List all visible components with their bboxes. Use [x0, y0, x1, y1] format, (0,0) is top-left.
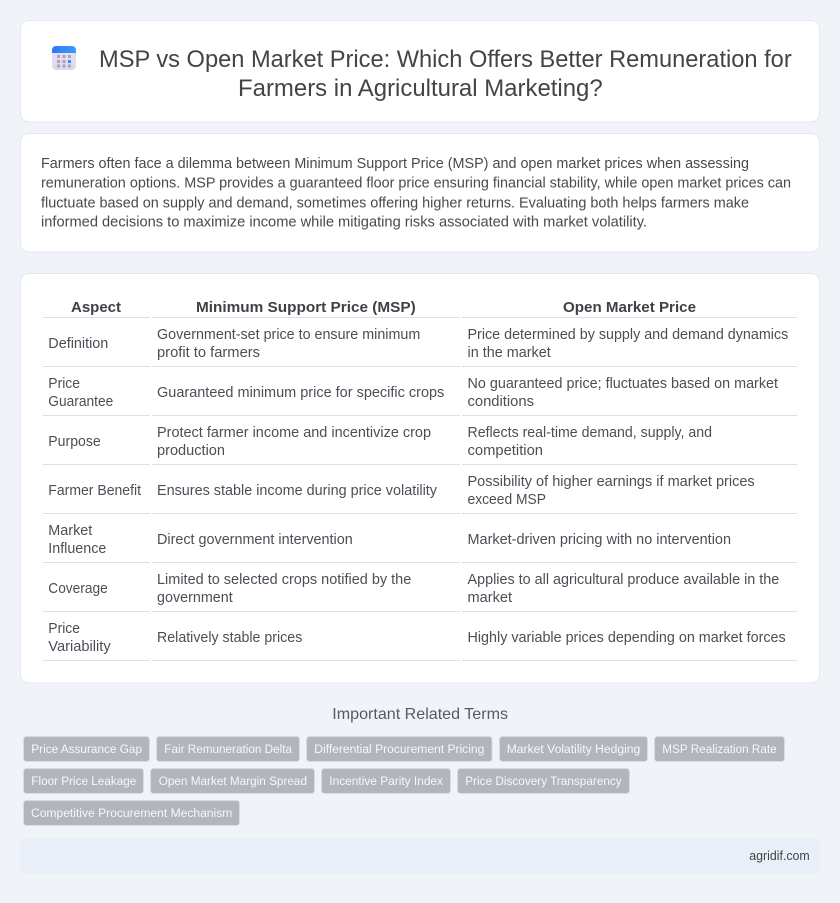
icon: calendar — [52, 46, 76, 70]
tag — [458, 768, 630, 794]
row: coverage: Applies to all agricultural produce available in the — [468, 572, 779, 588]
row: price guarantee: No guaranteed price; fluctuates based on market — [468, 376, 778, 392]
tag: Market Volatility Hedging — [507, 742, 640, 756]
tag: Incentive Parity Index — [329, 774, 443, 788]
panel: introduction — [20, 134, 820, 252]
tag — [24, 736, 150, 762]
title: MSP vs Open Market Price: Which Offers Better Remuneration for — [99, 46, 792, 73]
row: farmer benefit: Ensures stable income during price volatility — [157, 483, 438, 499]
row: price variability: Price — [48, 621, 80, 637]
row: coverage — [48, 572, 779, 606]
tag: Differential Procurement Pricing — [314, 742, 484, 756]
tag — [654, 736, 784, 762]
table header: Aspect — [71, 300, 121, 316]
row: price variability — [48, 621, 786, 655]
row: price variability: Highly variable prices depending on market forces — [468, 630, 786, 646]
title: Farmers in Agricultural Marketing? — [238, 75, 603, 102]
row: definition: in the market — [468, 345, 551, 361]
row: purpose: production — [157, 443, 225, 459]
tag — [24, 800, 240, 826]
row: market influence: Direct government intervention — [157, 532, 353, 548]
tag — [322, 768, 450, 794]
row: market influence — [48, 523, 731, 557]
row: purpose: competition — [468, 443, 543, 459]
row: definition: Government-set price to ensure minimum — [157, 327, 420, 343]
tag: Price Assurance Gap — [31, 742, 142, 756]
row: farmer benefit: Farmer Benefit — [48, 483, 141, 499]
row: coverage: government — [157, 590, 233, 606]
intro text: Farmers often face a dilemma between Minimum Support Price (MSP) and open market prices when assessing — [41, 156, 749, 172]
row: price guarantee: Guarantee — [48, 394, 113, 410]
row: price guarantee: Price — [48, 376, 80, 392]
panel: comparison table — [20, 274, 820, 683]
intro text: informed decisions to maximize income while mitigating risks associated with market volatility. — [41, 214, 647, 230]
tag — [500, 736, 648, 762]
heading: important related terms: Important Related Terms — [332, 706, 508, 723]
row: farmer benefit — [48, 474, 755, 508]
row: purpose: Protect farmer income and incentivize crop — [157, 425, 431, 441]
footer: agridif.com — [749, 848, 810, 863]
tag: Price Discovery Transparency — [465, 774, 623, 788]
footer — [20, 839, 820, 873]
row: market influence: Market — [48, 523, 92, 539]
row: market influence: Influence — [48, 541, 106, 557]
row: price guarantee: Guaranteed minimum price for specific crops — [157, 385, 444, 401]
row: farmer benefit: exceed MSP — [468, 492, 546, 508]
tag: Open Market Margin Spread — [159, 774, 307, 788]
row: definition — [48, 327, 788, 361]
row: definition: profit to farmers — [157, 345, 260, 361]
intro text — [41, 156, 791, 230]
row: definition: Price determined by supply and demand dynamics — [468, 327, 788, 343]
tag — [150, 768, 314, 794]
related terms tags — [24, 736, 784, 826]
tag — [24, 768, 144, 794]
row: farmer benefit: Possibility of higher earnings if market prices — [468, 474, 755, 490]
row: purpose — [48, 425, 712, 459]
row: price guarantee: conditions — [468, 394, 534, 410]
row: market influence: Market-driven pricing with no intervention — [468, 532, 731, 548]
table header: Minimum Support Price (MSP) — [196, 300, 416, 316]
table header — [71, 300, 696, 316]
tag: Competitive Procurement Mechanism — [31, 806, 232, 820]
row: purpose: Reflects real-time demand, supply, and — [468, 425, 712, 441]
row: purpose: Purpose — [48, 434, 101, 450]
panel: header — [20, 20, 820, 122]
title — [99, 46, 792, 102]
row: price guarantee — [48, 376, 778, 410]
tag — [156, 736, 300, 762]
row: coverage: market — [468, 590, 512, 606]
tag — [306, 736, 492, 762]
row: coverage: Limited to selected crops notified by the — [157, 572, 411, 588]
row: coverage: Coverage — [48, 581, 108, 597]
table header: Open Market Price — [563, 300, 696, 316]
tag: Fair Remuneration Delta — [164, 742, 292, 756]
row: price variability: Relatively stable prices — [157, 630, 302, 646]
row: price variability: Variability — [48, 639, 111, 655]
row: definition: Definition — [48, 336, 108, 352]
tag: Floor Price Leakage — [31, 774, 137, 788]
intro text: fluctuate based on supply and demand, sometimes offering higher returns. Evaluating both helps farmers make — [41, 196, 749, 212]
intro text: remuneration options. MSP provides a guaranteed floor price ensuring financial stability, while open market prices can — [41, 176, 791, 192]
tag: MSP Realization Rate — [662, 742, 777, 756]
